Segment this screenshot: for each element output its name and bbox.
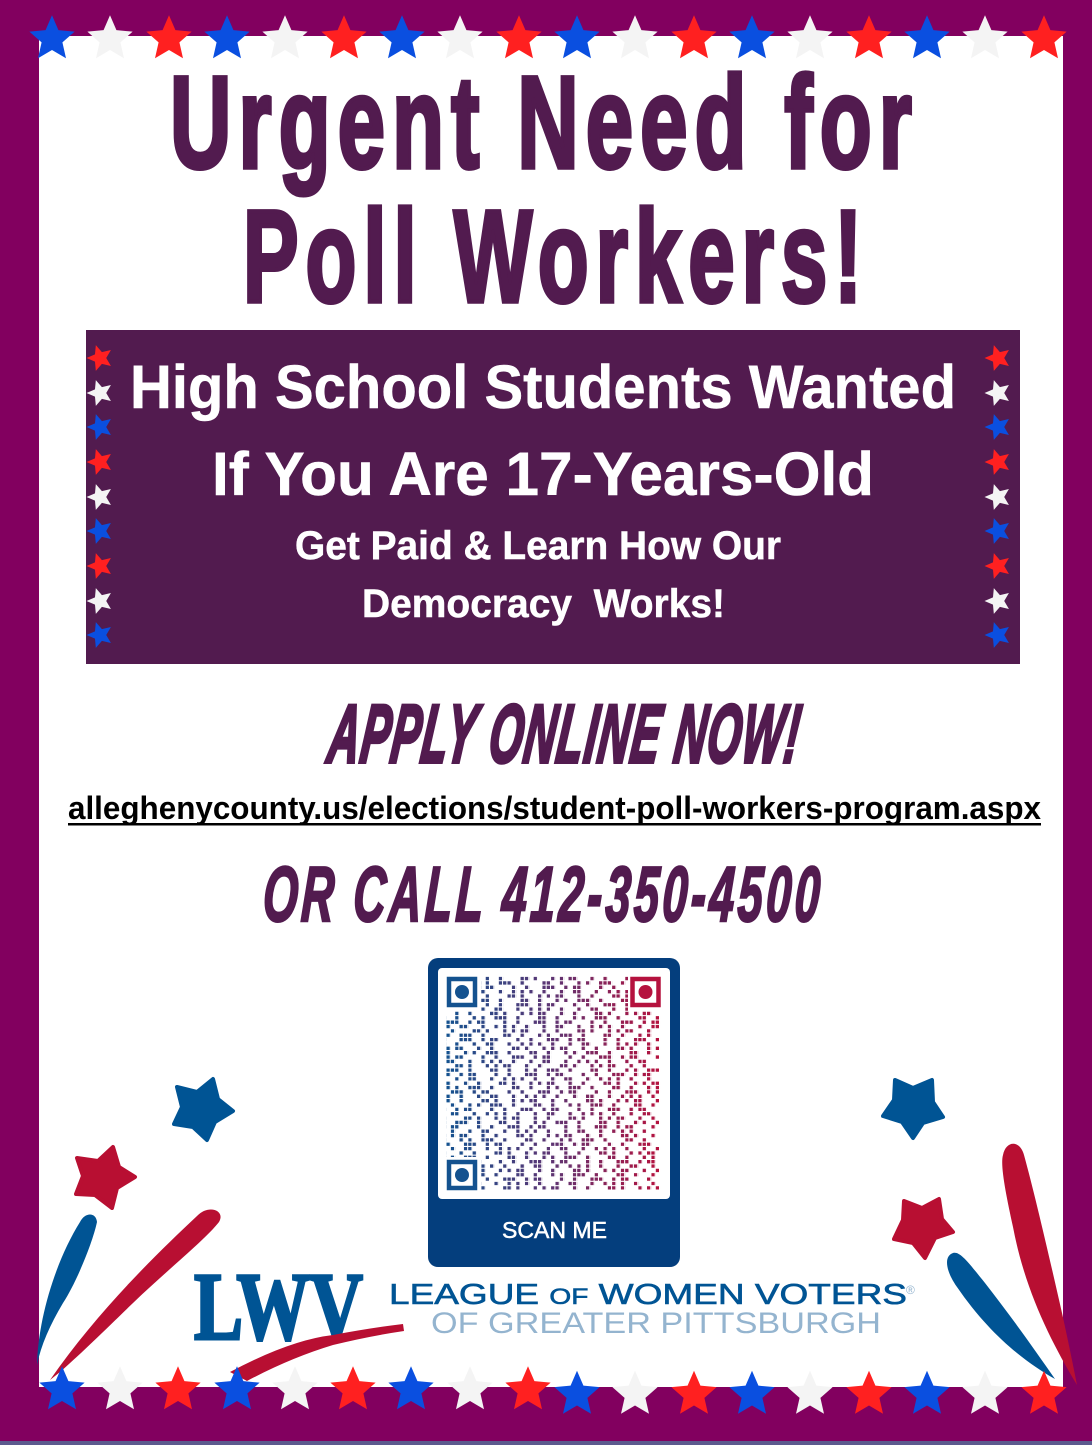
qr finder top left (445, 975, 481, 1011)
firework streak: right blue (947, 1253, 1055, 1379)
scan me label: SCAN ME (502, 1217, 607, 1243)
firework star: left red (76, 1147, 135, 1208)
logo swoosh (230, 1324, 404, 1381)
firework star: left blue (174, 1079, 233, 1140)
league name: LEAGUE OF WOMEN VOTERS (389, 1279, 907, 1311)
left star column (86, 345, 111, 648)
qr finder top right (628, 975, 664, 1011)
panel text: Get Paid & Learn How Our (295, 524, 781, 568)
panel text: High School Students Wanted (130, 353, 956, 421)
registered mark: ® (906, 1283, 915, 1297)
firework star: right blue (883, 1080, 943, 1138)
qr finder bottom left (445, 1157, 481, 1193)
qr code card (428, 958, 680, 1267)
firework streak: right red (1002, 1144, 1077, 1385)
firework streak: left red (50, 1209, 221, 1380)
bottom edge strip (0, 1441, 1092, 1445)
firework streak: left blue (37, 1214, 97, 1365)
right star column (984, 345, 1009, 648)
lwv logo (194, 1253, 915, 1381)
panel: high school students wanted (86, 330, 1020, 664)
top star border (29, 15, 1067, 58)
chapter name: OF GREATER PITTSBURGH (431, 1307, 881, 1340)
bottom star border (39, 1366, 1067, 1414)
panel text: If You Are 17-Years-Old (212, 440, 874, 508)
lwv letters: LWV (194, 1253, 363, 1360)
application url: alleghenycounty.us/elections/student-poll-workers-program.aspx (68, 790, 1041, 826)
panel text: Democracy Works! (362, 582, 725, 626)
qr modules (446, 976, 659, 1190)
title (170, 48, 919, 330)
panel text (130, 353, 956, 626)
firework star: right red (894, 1199, 953, 1258)
